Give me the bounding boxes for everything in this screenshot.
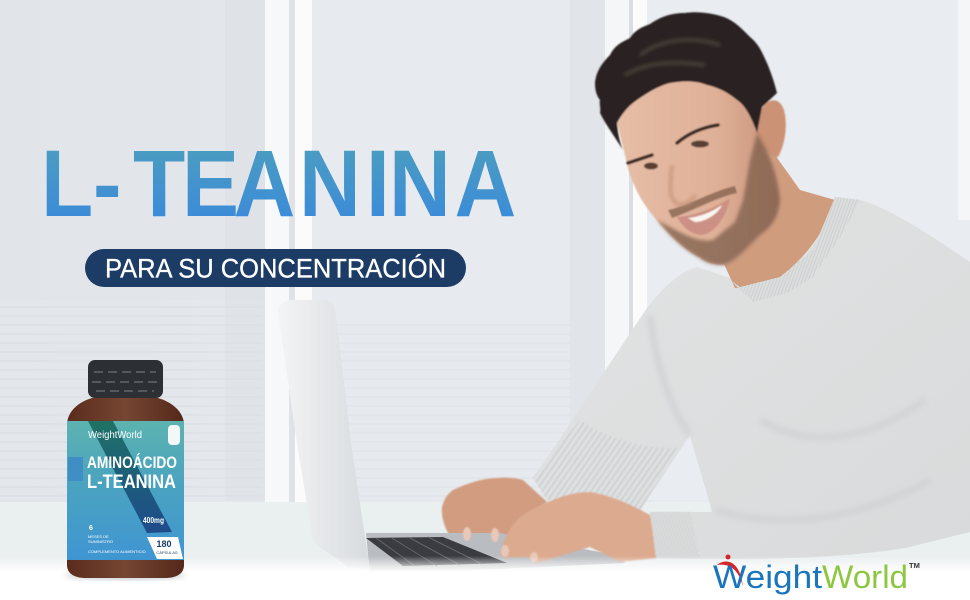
capsules: 180	[156, 539, 172, 549]
product bottle: SUMINISTRO	[88, 539, 113, 544]
logo: WeightWorld	[713, 554, 920, 595]
logo: WeightWorld: World	[822, 559, 908, 595]
keyboard	[366, 537, 507, 566]
smile	[677, 198, 730, 235]
beard stubble	[657, 133, 780, 265]
label	[67, 421, 184, 560]
product bottle: L-TEANINA	[87, 472, 176, 493]
title: L-TEANINA	[41, 131, 516, 237]
neck	[723, 130, 835, 288]
moustache	[668, 186, 737, 218]
product bottle	[65, 360, 185, 580]
bottom white fade	[0, 556, 970, 572]
hand left	[442, 478, 547, 545]
logo: WeightWorld: Weight	[713, 559, 822, 595]
photo: man with sweater	[442, 12, 970, 559]
laptop base	[366, 533, 625, 575]
hair	[595, 12, 777, 150]
label diagonal band	[88, 421, 172, 533]
product bottle: CÁPSULAS	[156, 550, 178, 555]
hand right with cuff	[463, 492, 700, 563]
brand on label: WeightWorld	[88, 429, 142, 441]
product name: AMINOÁCIDO	[87, 453, 177, 472]
badge	[168, 425, 180, 445]
laptop	[278, 300, 625, 575]
product bottle: COMPLEMENTO ALIMENTICIO	[88, 549, 146, 554]
face	[617, 70, 780, 265]
cap	[88, 360, 163, 398]
collar	[730, 197, 860, 302]
logo: WeightWorld: TM	[909, 561, 920, 570]
sweater	[533, 197, 970, 559]
sweater folds	[650, 315, 930, 520]
hair highlights	[625, 40, 720, 75]
screen back	[278, 300, 370, 570]
nose shade	[670, 165, 696, 204]
bottle body	[67, 398, 184, 578]
ear	[750, 100, 786, 157]
product bottle: MESES DE	[88, 534, 109, 539]
subtitle pill: PARA SU CONCENTRACIÓN	[105, 254, 446, 284]
dose: 400mg	[143, 515, 164, 525]
months: 6	[89, 525, 93, 532]
eyes and brows	[628, 125, 718, 170]
head	[595, 12, 786, 265]
sleeve ribbing	[533, 420, 680, 510]
